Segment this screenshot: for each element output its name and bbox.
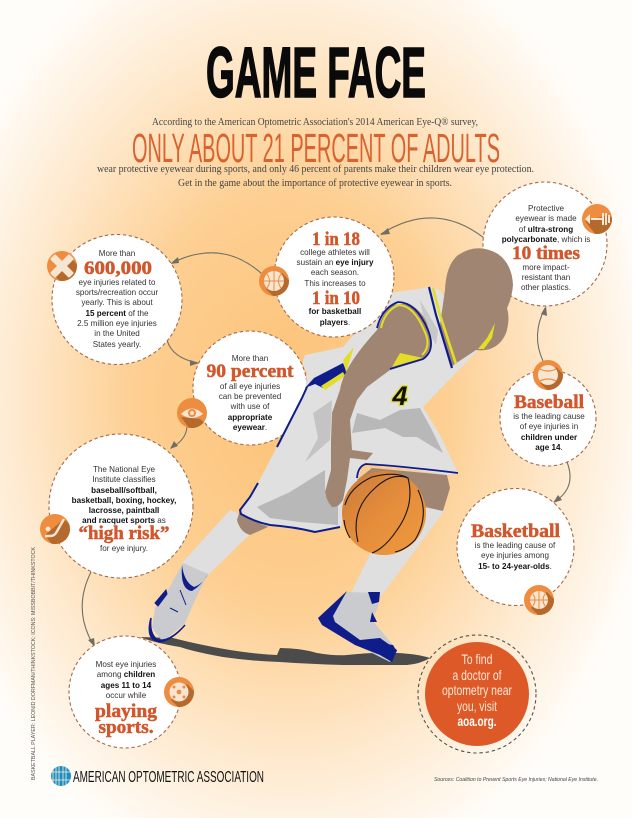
callout: find a doctor: aoa.org. [458, 713, 496, 729]
panel: playing sports: sports. [98, 718, 154, 738]
panel: 90 percent preventable: appropriate [228, 413, 273, 422]
panel: playing sports: among children [97, 670, 155, 679]
panel: 600,000 injuries: 600,000 [84, 259, 152, 279]
icon: hockey stick [40, 514, 70, 544]
left shoe [149, 563, 208, 642]
panel: 1 in 18 college athletes: This increases to [304, 279, 366, 288]
panel: 1 in 18 college athletes: college athletes will [300, 248, 370, 257]
panel: 600,000 injuries: eye injuries related to [79, 278, 156, 287]
basketball player illustration [140, 248, 513, 665]
head, neck and shoulder [440, 248, 513, 366]
panel: 90 percent preventable: of all eye injuries [220, 382, 280, 391]
panel: 90 percent preventable: with use of [230, 402, 270, 411]
panel: high risk sports: basketball, boxing, hockey, [72, 496, 176, 505]
legs [182, 510, 265, 575]
panel: baseball: of eye injuries in [520, 422, 578, 431]
panel: 600,000 injuries: yearly. This is about [81, 298, 153, 307]
panel: basketball: is the leading cause of [475, 541, 556, 550]
panel: 600,000 injuries: 15 percent of the [86, 309, 149, 318]
jersey fold shadows [352, 408, 443, 453]
panel: protective eyewear polycarbonate: 10 times [512, 244, 580, 264]
basketball [342, 471, 426, 555]
icon: bandage [47, 251, 77, 281]
panel: 1 in 18 college athletes: sustain an eye injury [297, 258, 374, 267]
callout: find a doctor: you, visit [457, 698, 497, 714]
panel: baseball [500, 370, 596, 466]
callout: find a doctor: To find [462, 651, 492, 667]
intro text [97, 117, 534, 189]
panel: playing sports: playing [95, 702, 158, 722]
panel: 90 percent preventable: More than [232, 354, 268, 363]
panel: 90 percent preventable: eyewear. [233, 423, 267, 432]
panel: 1 in 18 college athletes: each season. [311, 268, 359, 277]
panel: protective eyewear polycarbonate: eyewear is made [515, 214, 577, 223]
panel: high risk sports: for eye injury. [100, 544, 148, 553]
panel: playing sports: occur while [106, 691, 147, 700]
panel: protective eyewear polycarbonate: Protective [528, 204, 564, 213]
title: GAME FACE [206, 34, 426, 113]
panel: 600,000 injuries: States yearly. [93, 340, 141, 349]
panel: high risk sports: “high risk” [78, 524, 170, 544]
panel: protective eyewear polycarbonate: more impact- [522, 263, 570, 272]
panel: 600,000 injuries: in the United [94, 329, 140, 338]
callout: find a doctor [418, 635, 536, 753]
panel: 1 in 18 college athletes [274, 217, 394, 337]
right shoe [318, 591, 397, 662]
icon: dumbbell [582, 204, 612, 234]
callout: find a doctor: optometry near [442, 682, 512, 698]
panel: basketball: eye injuries among [481, 551, 549, 560]
panel: protective eyewear polycarbonate: of ultra-strong [519, 225, 573, 234]
logo: American Optometric Association: AMERICAN OPTOMETRIC ASSOCIATION [73, 769, 264, 786]
logo: American Optometric Association [51, 766, 264, 786]
panel: 600,000 injuries: sports/recreation occur [76, 288, 158, 297]
thighs [357, 468, 450, 511]
panel: basketball: 15- to 24-year-olds. [478, 562, 552, 571]
panel: baseball: is the leading cause [513, 412, 585, 421]
panel: protective eyewear polycarbonate [483, 182, 607, 306]
panel: baseball: Baseball [514, 393, 584, 413]
intro text: Get in the game about the importance of protective eyewear in sports. [178, 178, 452, 189]
panel: high risk sports: Institute classifies [92, 475, 156, 484]
icon: basketball [524, 585, 554, 615]
panel: high risk sports: The National Eye [93, 465, 156, 474]
panel: 600,000 injuries: 2.5 million eye injuries [77, 319, 157, 328]
panel: 600,000 injuries: More than [99, 249, 135, 258]
icon: basketball [259, 266, 289, 296]
panel: baseball: age 14. [535, 443, 563, 452]
panel: playing sports: ages 11 to 14 [101, 681, 152, 690]
panel: basketball: Basketball [471, 522, 560, 542]
shadow [140, 637, 430, 665]
icon: soccer ball [164, 677, 194, 707]
sources: Sources: Coalition to Prevent Sports Eye Injuries; National Eye Institute. [434, 777, 598, 783]
panel: protective eyewear polycarbonate: resistant than [522, 273, 570, 282]
left arm [325, 303, 432, 507]
panel: 1 in 18 college athletes: 1 in 10 [312, 289, 360, 309]
panel: playing sports: Most eye injuries [96, 660, 156, 669]
shorts trim [240, 387, 340, 532]
panel: baseball: children under [521, 433, 578, 442]
panel: protective eyewear polycarbonate: polycarbonate, which is [502, 235, 590, 244]
panel: 1 in 18 college athletes: 1 in 18 [312, 230, 360, 250]
panel: 1 in 18 college athletes: players. [320, 318, 350, 327]
photo credit: BASKETBALL PLAYER: LEONID DORFMAN/THINKSTOCK; ICONS: MISSBOBBIT/THINKSTOCK [31, 547, 37, 780]
jersey trim [377, 302, 431, 369]
panel: 90 percent preventable [193, 331, 307, 445]
icon: baseball [533, 360, 563, 390]
icon: eye [177, 398, 207, 428]
panel: basketball [457, 488, 574, 606]
panel: high risk sports: lacrosse, paintball [89, 506, 159, 515]
intro text: wear protective eyewear during sports, and only 46 percent of parents make their children wear eye protection. [97, 164, 534, 175]
panel: 90 percent preventable: 90 percent [206, 362, 294, 382]
intro text: According to the American Optometric Association's 2014 American Eye-Q® survey, [152, 117, 478, 128]
panel: 90 percent preventable: can be prevented [219, 392, 281, 401]
arrows [82, 218, 570, 647]
callout: find a doctor: a doctor of [452, 667, 502, 683]
panel: 600,000 injuries [52, 234, 182, 364]
panel: 1 in 18 college athletes: for basketball [309, 307, 361, 316]
panel: protective eyewear polycarbonate: other plastics. [521, 283, 571, 292]
jersey number: 4 [391, 381, 408, 411]
panel: high risk sports [49, 434, 193, 578]
jersey and shorts [240, 287, 478, 532]
panel: high risk sports: and racquet sports as [82, 516, 166, 525]
panel: high risk sports: baseball/softball, [91, 486, 157, 495]
panel: playing sports [69, 636, 181, 748]
